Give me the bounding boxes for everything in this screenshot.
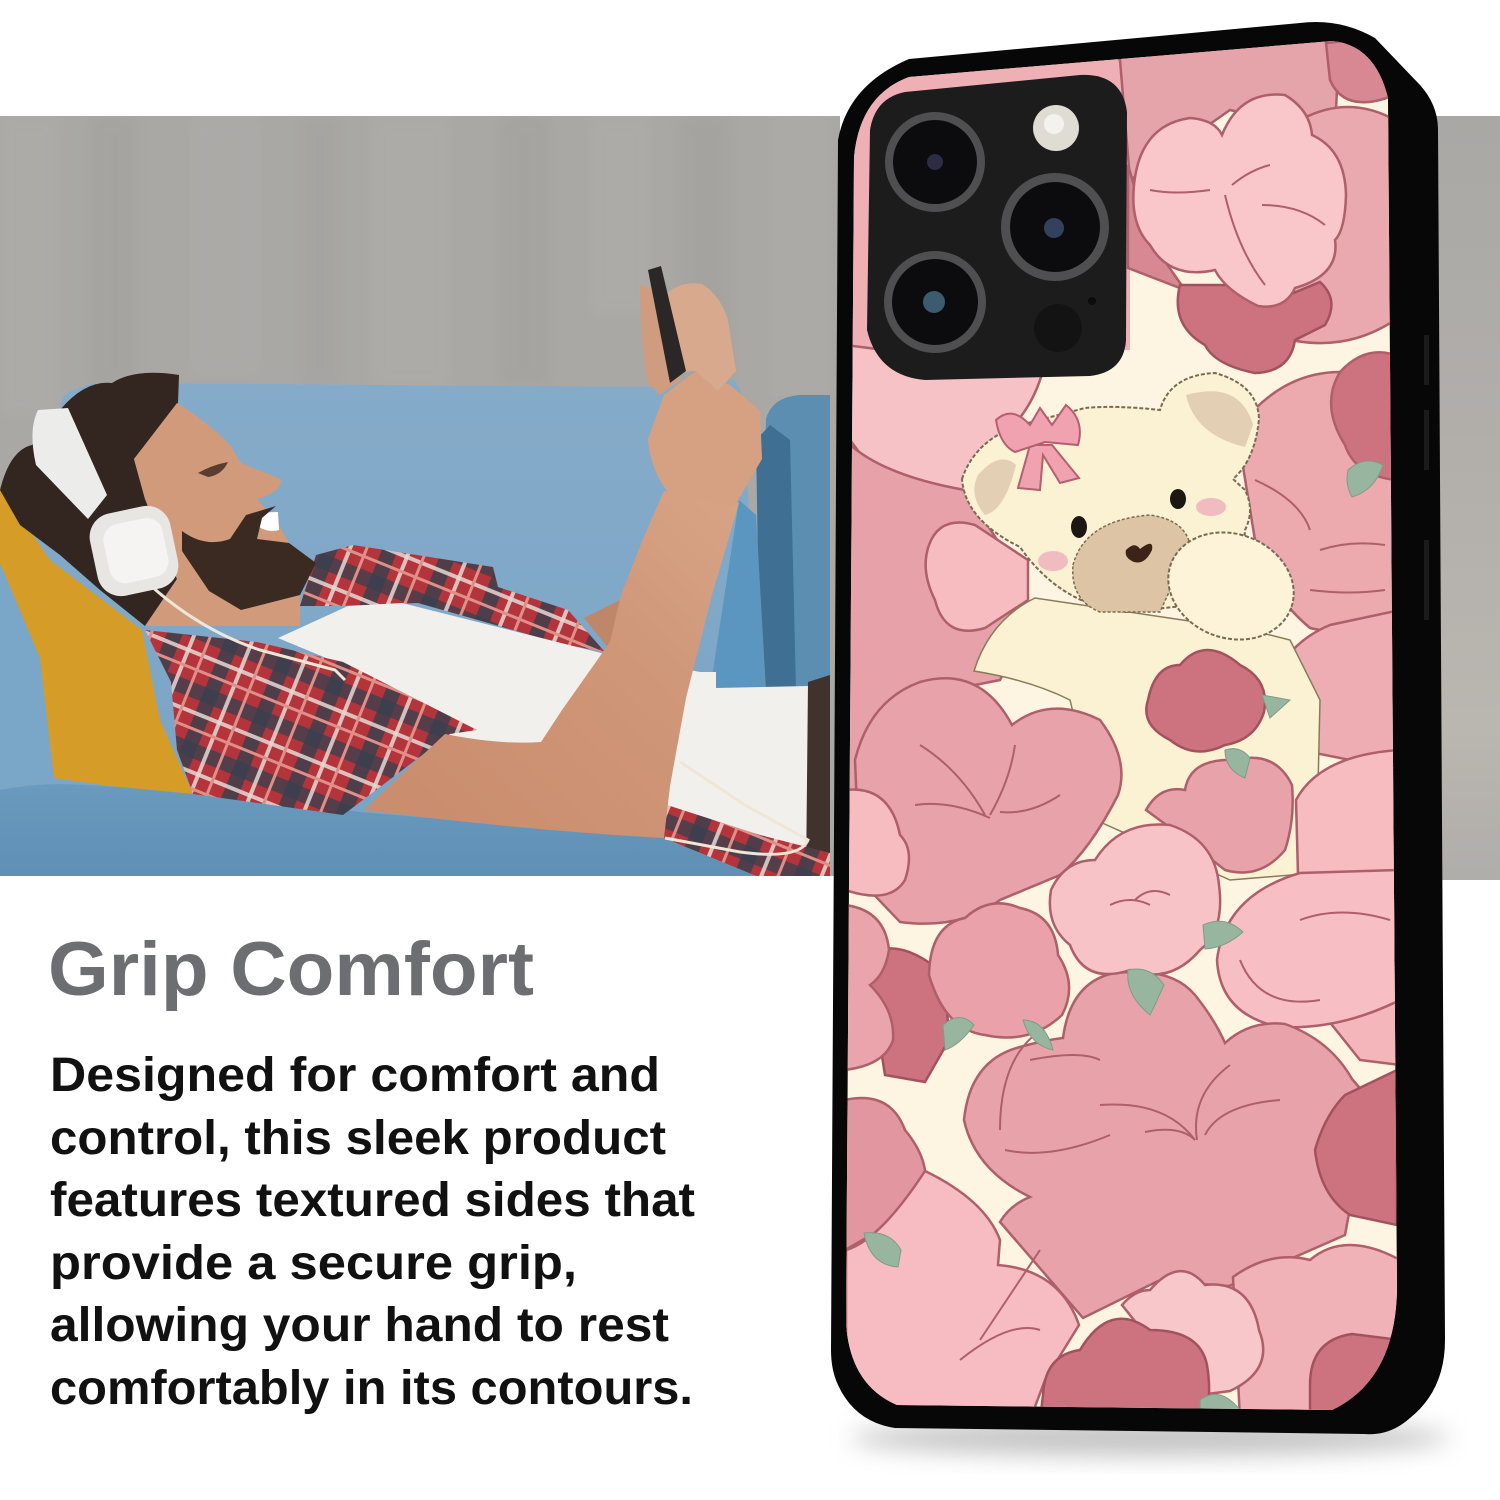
lower hand [648, 371, 762, 507]
sofa [0, 380, 830, 880]
bear body [974, 598, 1320, 880]
phone case [831, 22, 1445, 1434]
body text block: features textured sides that [50, 1174, 695, 1227]
held phone [648, 266, 686, 383]
lower left light petals [846, 1171, 1079, 1420]
camera module [867, 75, 1127, 380]
body text block: comfortably in its contours. [50, 1362, 693, 1415]
bear eyes [1071, 516, 1087, 538]
bear cheeks [1038, 551, 1068, 571]
photo: lifestyle scene of man on sofa [0, 116, 840, 880]
lens top left [885, 112, 985, 212]
right light petals [1296, 750, 1400, 1000]
body text block: provide a secure grip, [50, 1237, 577, 1290]
bear inner ears [1186, 391, 1253, 447]
body text block: allowing your hand to rest [50, 1299, 669, 1352]
upper hand behind phone [640, 284, 680, 395]
plaid shirt body and sleeve [145, 630, 477, 815]
bear paw [1153, 515, 1309, 657]
far arm [584, 600, 620, 646]
sofa right arm [760, 395, 830, 690]
white t-shirt [278, 603, 812, 850]
flower line details [915, 165, 1390, 1360]
wall background [0, 116, 840, 876]
left rose lower [845, 1098, 926, 1250]
near arm [364, 491, 739, 838]
hair [0, 373, 179, 626]
right wall strip [1430, 116, 1500, 880]
dark rose right [1315, 1070, 1397, 1225]
bear [962, 373, 1320, 880]
plaid shirt tail [664, 804, 830, 880]
huge bottom flower [964, 972, 1370, 1318]
flash [1033, 105, 1079, 151]
face and neck [134, 403, 300, 626]
green leaves [864, 461, 1383, 1415]
upper hand fingers [664, 283, 736, 391]
top light flower [1133, 94, 1346, 307]
white earphone cable [150, 585, 808, 854]
sofa back cushions [0, 380, 760, 850]
yellow pillow [0, 487, 193, 794]
light flower left edge [845, 790, 909, 896]
lower right petals [1233, 1245, 1400, 1420]
bear nose [1126, 544, 1152, 562]
microphone and lidar [1034, 304, 1082, 352]
case artwork [840, 30, 1400, 1420]
trousers [806, 675, 830, 853]
sofa left low cushion [0, 564, 6, 600]
eye [198, 462, 228, 477]
bear head and ears [962, 373, 1259, 612]
lens bottom left [884, 251, 986, 353]
dark rose left [866, 948, 949, 1082]
heading: Grip Comfort: Grip Comfort [48, 927, 534, 1012]
sofa seat [0, 784, 766, 880]
pink bow [996, 405, 1080, 490]
side buttons [1424, 335, 1429, 620]
beard [182, 506, 316, 610]
case body [831, 22, 1445, 1434]
body text block [50, 1049, 695, 1415]
plaid collar and shirt front [300, 545, 605, 652]
left edge petals [845, 905, 893, 1070]
phone drop shadow [850, 1420, 1450, 1456]
headphones [32, 408, 183, 601]
body text block: Designed for comfort and [50, 1049, 660, 1102]
mouth [246, 512, 279, 531]
background petals right [1237, 372, 1400, 631]
pink small flower under rose [1146, 758, 1293, 872]
rear small pink flower [926, 522, 1028, 631]
bear snout [1073, 515, 1190, 612]
background petals left [845, 345, 1043, 496]
dark rose near bear [1146, 650, 1265, 751]
lens right [1001, 173, 1109, 281]
dark rose under top flower [1178, 282, 1331, 373]
medium flower [929, 903, 1069, 1038]
small light flower bottom [1122, 1271, 1263, 1395]
dark rose bottom [1040, 1319, 1209, 1420]
light flower center [1050, 824, 1220, 974]
big left flower [855, 678, 1121, 924]
body text block: control, this sleek product [50, 1112, 666, 1165]
background petals top [845, 60, 1130, 350]
